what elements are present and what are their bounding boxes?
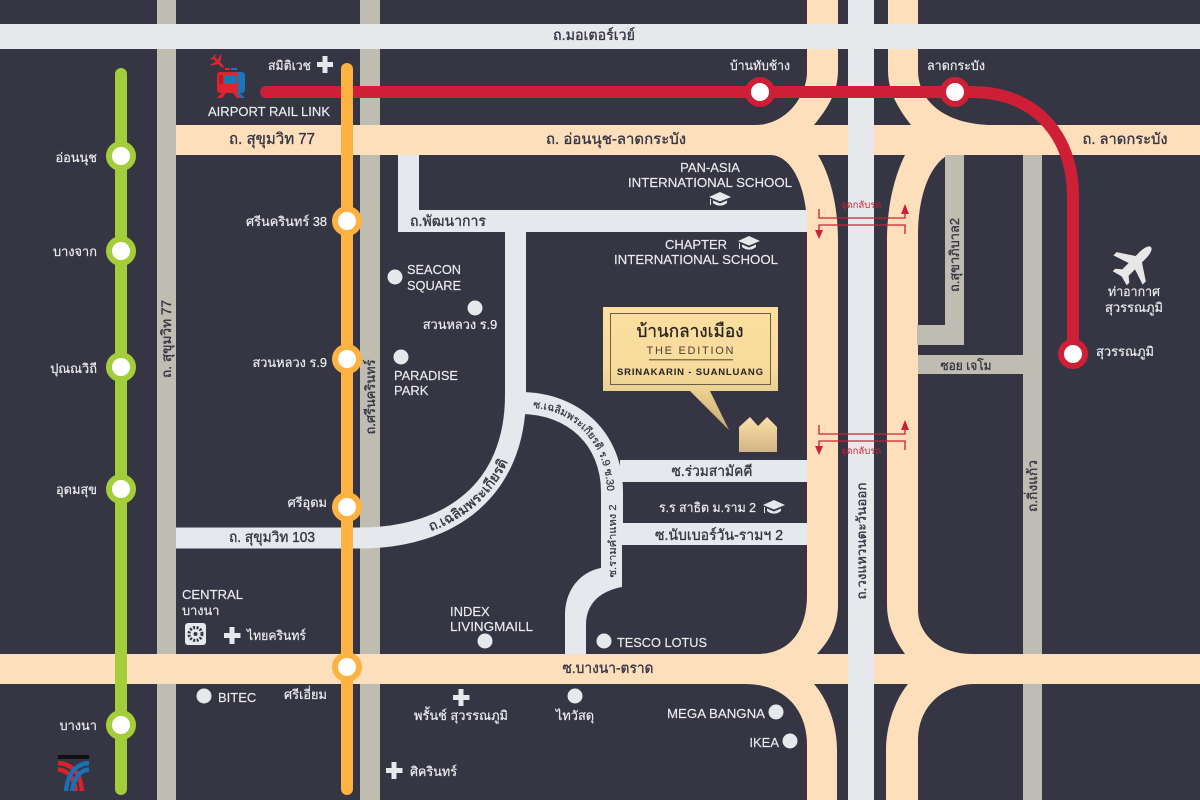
light local roads <box>176 155 807 654</box>
road labels: ถ.มอเตอร์เวย์ <box>553 27 635 44</box>
landmark: central bangna <box>182 587 243 645</box>
callout: project sign: THE EDITION <box>646 345 734 357</box>
school: chapter <box>614 236 778 267</box>
red station labels: สุวรรณภูมิ <box>1096 344 1154 360</box>
landmark: thai watsadu: ไทวัสดุ <box>555 708 594 724</box>
road labels: ถ. สุขุมวิท 77 <box>229 131 315 149</box>
hospital: thai nakarin <box>224 627 306 644</box>
road labels: ถ.ศรีนครินทร์ <box>362 360 378 434</box>
red station labels <box>730 58 1154 360</box>
landmark: ikea: IKEA <box>749 735 779 750</box>
label: suvarnabhumi airport <box>1105 284 1163 316</box>
road labels: ถ.สุขาภิบาล2 <box>947 218 963 292</box>
school: pan-asia: INTERNATIONAL SCHOOL <box>628 175 792 190</box>
road labels: ถ.วงแหวนตะวันออก <box>854 482 869 600</box>
icon: airport rail link <box>207 51 245 98</box>
road labels: ซ.บางนา-ตราด <box>562 661 654 677</box>
landmark: mega bangna: MEGA BANGNA <box>667 706 765 721</box>
road labels: ถ.พัฒนาการ <box>410 214 486 230</box>
road labels: ถ. สุขุมวิท 77 <box>159 300 175 378</box>
road labels: ถ. สุขุมวิท 103 <box>229 530 315 546</box>
hospital: samitivej: สมิติเวช <box>268 58 311 73</box>
minor grey roads <box>157 0 1042 800</box>
landmark: ikea <box>749 734 798 750</box>
landmark: seacon square: SQUARE <box>407 278 461 293</box>
green station labels: ปุณณวิถี <box>50 361 97 377</box>
orange station labels: ศรีเอี่ยม <box>284 686 327 702</box>
hospital: sikarin <box>386 762 457 779</box>
landmark: index livingmall <box>450 604 533 648</box>
road labels: ซอย เจโม <box>940 358 992 373</box>
hospital: sikarin: ศิครินทร์ <box>410 764 457 779</box>
landmark: seacon square <box>388 262 461 293</box>
road labels: ซ.ร่วมสามัคคี <box>672 463 752 480</box>
school: satit ram 2: ร.ร สาธิต ม.ราม 2 <box>659 500 756 515</box>
red station labels: บ้านทับช้าง <box>730 58 790 73</box>
red airport rail link line <box>266 92 1073 354</box>
road labels: ซ.เฉลิมพระเกียรติ ร.9 ซ.30 <box>534 402 614 491</box>
red stations <box>748 80 1085 366</box>
callout: project sign: บ้านกลางเมือง <box>636 321 744 341</box>
school: pan-asia: PAN-ASIA <box>680 160 740 175</box>
orange station labels: ศรีนครินทร์ 38 <box>246 214 327 229</box>
landmark: bitec <box>196 688 256 705</box>
landmark: paradise park: PARK <box>394 383 429 398</box>
hospital: princ suvarnabhumi: พรั้นช์ สุวรรณภูมิ <box>414 706 508 724</box>
hospital: samitivej <box>268 56 333 73</box>
landmark: thai watsadu <box>555 688 594 724</box>
label: suvarnabhumi airport: สุวรรณภูมิ <box>1105 300 1163 316</box>
green station labels: บางจาก <box>53 244 97 259</box>
landmark: bitec: BITEC <box>218 690 256 705</box>
landmark: paradise park <box>394 350 458 398</box>
road labels: ถ.กิ่งแก้ว <box>1024 460 1040 512</box>
landmark: index livingmall: INDEX <box>450 604 490 619</box>
label: suvarnabhumi airport: ท่าอากาศ <box>1108 284 1160 299</box>
road labels <box>159 27 1168 677</box>
icon: project location house <box>739 417 777 452</box>
landmark: tesco lotus: TESCO LOTUS <box>617 635 707 650</box>
green station labels: อุดมสุข <box>56 482 97 498</box>
landmark: central bangna: บางนา <box>182 603 220 618</box>
green station labels: บางนา <box>60 718 97 733</box>
green BTS line <box>115 74 127 789</box>
landmark: central bangna: CENTRAL <box>182 587 243 602</box>
u-turn bottom <box>815 420 909 457</box>
callout: project sign: SRINAKARIN - SUANLUANG <box>617 367 763 378</box>
landmark: suan luang <box>423 300 497 332</box>
road labels: ซ.นับเบอร์วัน-รามฯ 2 <box>655 527 783 544</box>
hospital: thai nakarin: ไทยครินทร์ <box>246 628 306 643</box>
orange stations <box>335 209 359 679</box>
school: chapter: CHAPTER <box>665 237 727 252</box>
road labels: ซ.รามคำแหง 2 <box>607 504 619 578</box>
orange line <box>341 69 353 789</box>
orange station labels <box>246 214 327 702</box>
landmark: suan luang: สวนหลวง ร.9 <box>423 317 497 332</box>
green stations <box>109 144 133 737</box>
icon: airplane <box>1105 232 1166 293</box>
landmark: paradise park: PARADISE <box>394 368 458 383</box>
green station labels <box>50 150 97 733</box>
label: airport rail link: AIRPORT RAIL LINK <box>208 104 330 119</box>
u-turn top <box>815 200 909 239</box>
red station labels: ลาดกระบัง <box>927 58 985 73</box>
u-turn bottom: จุดกลับรถ <box>841 446 881 457</box>
orange station labels: ศรีอุดม <box>288 495 327 511</box>
icon: bts logo <box>58 755 89 791</box>
road labels: ถ. ลาดกระบัง <box>1082 131 1168 148</box>
school: chapter: INTERNATIONAL SCHOOL <box>614 252 778 267</box>
callout: project sign <box>603 307 778 430</box>
grey side roads <box>917 155 1024 374</box>
road labels: ถ.เฉลิมพระเกียรติ <box>429 458 508 531</box>
school: pan-asia <box>628 160 792 206</box>
orange station labels: สวนหลวง ร.9 <box>252 355 327 370</box>
landmark: index livingmall: LIVINGMAILL <box>450 619 533 634</box>
u-turn top: จุดกลับรถ <box>841 200 881 211</box>
green station labels: อ่อนนุช <box>55 150 97 166</box>
landmark: seacon square: SEACON <box>407 262 461 277</box>
hospital: princ suvarnabhumi <box>414 689 508 724</box>
road labels: ถ. อ่อนนุช-ลาดกระบัง <box>546 131 686 149</box>
